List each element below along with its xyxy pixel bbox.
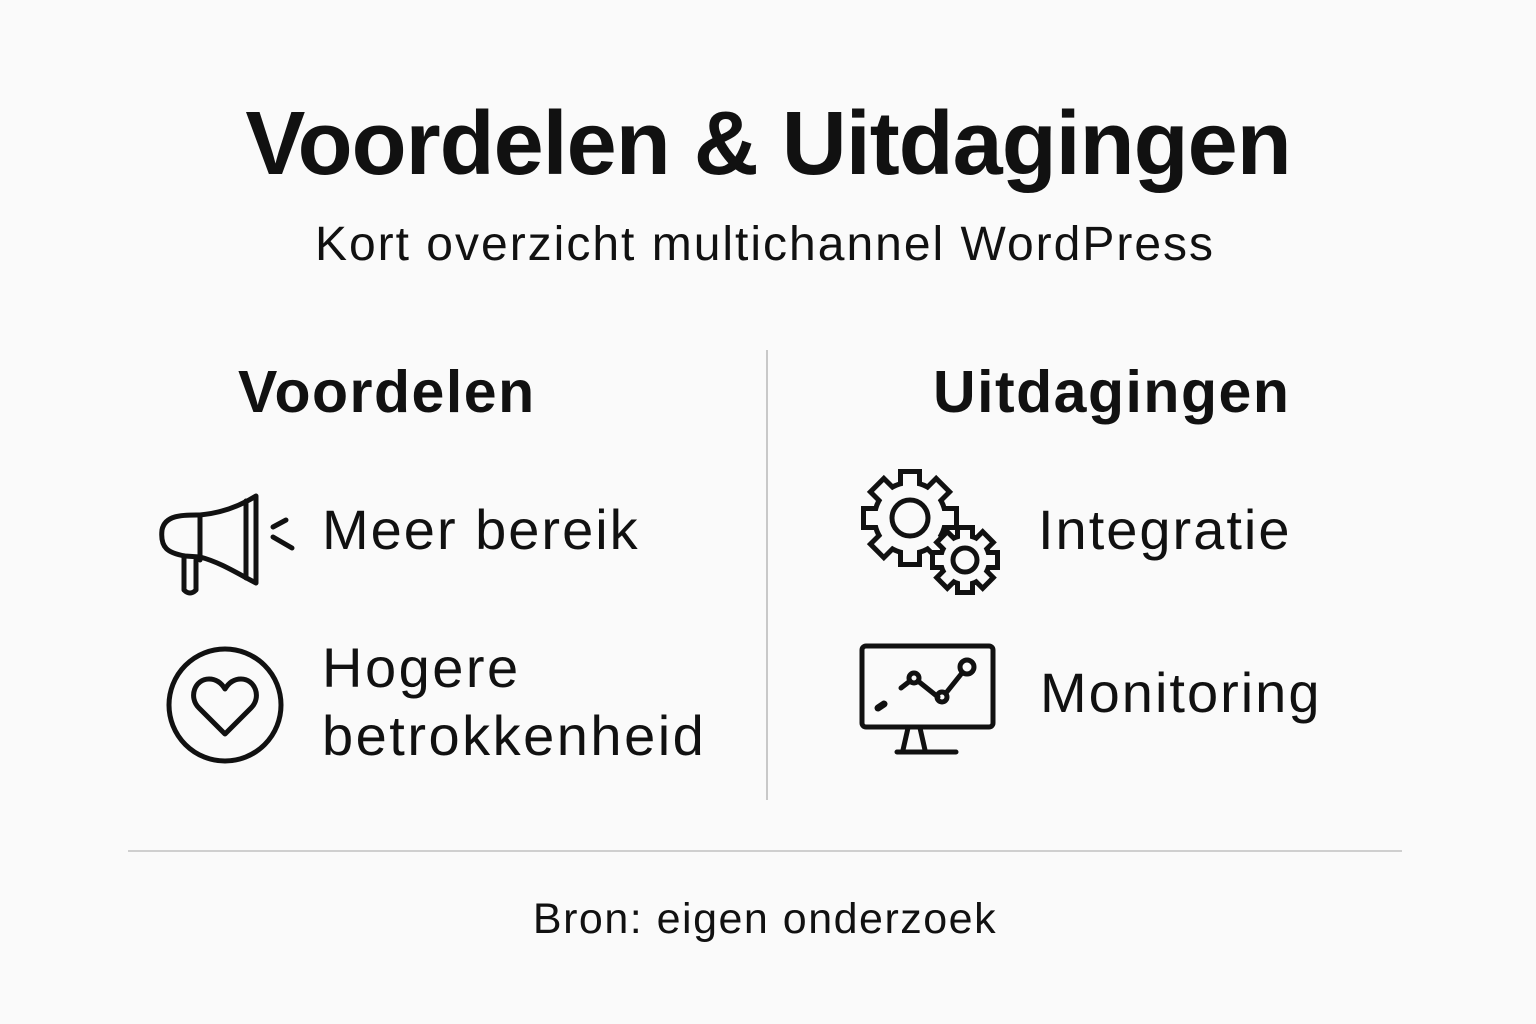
subtitle: Kort overzicht multichannel WordPress	[315, 218, 1215, 271]
icon: gears	[861, 469, 1000, 595]
horizontal divider	[128, 850, 1402, 852]
icon: heart in circle	[166, 646, 284, 764]
source note: Bron: eigen onderzoek	[533, 895, 997, 943]
text: Hogere betrokkenheid	[322, 636, 706, 767]
heading: Uitdagingen: Uitdagingen	[933, 359, 1290, 425]
heading: Voordelen: Voordelen	[238, 359, 536, 425]
text: Meer bereik: Meer bereik	[322, 498, 640, 561]
title: Voordelen & Uitdagingen	[245, 94, 1291, 194]
icon: monitor with chart	[860, 644, 996, 754]
icon: megaphone	[159, 494, 294, 596]
text: Hogere betrokkenheid: betrokkenheid	[322, 704, 706, 767]
text: Hogere betrokkenheid: Hogere	[322, 636, 521, 699]
vertical divider	[766, 350, 768, 800]
text: Integratie: Integratie	[1038, 498, 1292, 561]
text: Monitoring: Monitoring	[1040, 661, 1321, 724]
